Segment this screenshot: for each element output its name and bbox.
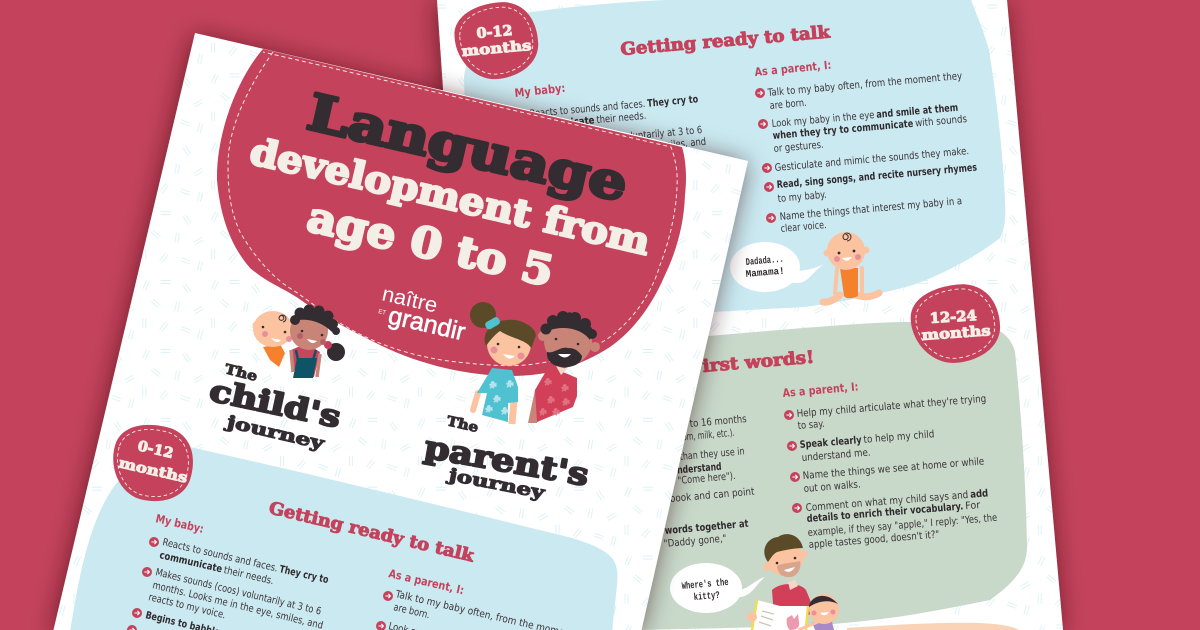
panel: peach next section — [847, 623, 1022, 630]
panel: title blob — [217, 49, 686, 376]
text: as a parent list 12-24 months: add — [970, 488, 989, 501]
text: as a parent list (back): Name the things that interest my baby in a — [779, 196, 963, 223]
text: as a parent list 12-24 months: details to enrich their vocabulary. — [806, 501, 964, 525]
heading: the child's journey: journey — [222, 412, 327, 454]
panel: getting ready to talk (back) — [464, 0, 1005, 320]
text: as a parent list 12-24 months: Comment on what my child says and — [805, 490, 969, 514]
front sheet — [53, 33, 748, 630]
badge: 12-24 months: months — [921, 323, 991, 344]
speech bubble: Dadada Mamama: Dadada... — [745, 254, 784, 269]
badge: 0-12 months (front): months — [117, 455, 189, 487]
speech bubble: Where's the kitty — [670, 563, 765, 613]
text: as a parent list 12-24 months: out on walks. — [803, 479, 861, 495]
logo: naitre et grandir — [378, 282, 468, 346]
heading: getting ready to talk (front): Getting ready to talk — [267, 498, 477, 567]
logo: naitre et grandir: ET — [378, 309, 387, 317]
title: age 0 to 5: age 0 to 5 — [303, 192, 558, 296]
heading: the parent's journey — [422, 413, 591, 504]
icon: mother and father — [470, 302, 600, 424]
panel: first words — [640, 322, 1027, 630]
text: child list 12-24 months (partly hidden): to 16 months — [689, 414, 747, 430]
text: as a parent list 12-24 months: example, if they say "apple," I reply: "Yes, the — [807, 513, 998, 539]
heading: the parent's journey: journey — [444, 465, 548, 504]
panel: getting ready to talk (front) — [70, 447, 617, 630]
text: as a parent list 12-24 months: Speak clearly — [799, 435, 862, 451]
logo: naitre et grandir: grandir — [386, 302, 468, 346]
heading: getting ready to talk (back): Getting ready to talk — [620, 22, 832, 60]
text: as a parent list (back): when they try to communicate — [772, 119, 914, 142]
speech bubble: Where's the kitty: Where's the — [681, 577, 729, 593]
text: as a parent list 12-24 months: As a parent, I: — [782, 379, 859, 400]
heading: first words: First words! — [689, 348, 815, 378]
text: child list 12-24 months (partly hidden): book and can point — [669, 487, 755, 505]
text: my baby list (back): communicate — [529, 115, 595, 132]
text: child list 12-24 months (partly hidden): mom, milk, etc.). — [675, 428, 735, 444]
text: as a parent list (front): are born. — [392, 602, 431, 621]
text: as a parent list (front) — [376, 566, 597, 630]
text: as a parent list (back): with sounds — [915, 114, 968, 130]
text: my baby list (front) — [127, 511, 329, 630]
heading: the parent's journey: parent's — [422, 429, 591, 494]
text: my baby list (back): Makes sounds (coos) voluntarily at 3 to 6 — [531, 125, 703, 151]
text: child list 12-24 months (partly hidden): than they use in — [679, 446, 745, 463]
speech bubble: Dadada Mamama: Mamama! — [745, 267, 785, 281]
text: child list 12-24 months (partly hidden): understand — [671, 462, 722, 477]
text: as a parent list (back): and smile at them — [876, 103, 959, 121]
icon: baby and girl — [252, 304, 345, 378]
title: Language: Language — [302, 82, 633, 213]
text: as a parent list (back): Read, sing songs, and recite nursery rhymes — [776, 163, 977, 191]
text: as a parent list 12-24 months: Name the things we see at home or while — [802, 456, 985, 482]
text: my baby list (front): communicate — [158, 550, 223, 575]
text: as a parent list 12-24 months: For — [965, 500, 981, 512]
text: my baby list (front): My baby: — [154, 511, 205, 536]
text: my baby list (front): Reacts to sounds and faces. — [161, 537, 279, 574]
heading: the child's journey: child's — [206, 374, 344, 435]
text: as a parent list 12-24 months: to help my child — [863, 429, 935, 446]
icon: seated baby — [823, 232, 879, 302]
text: as a parent list (back): clear voice. — [780, 220, 827, 235]
heading: the parent's journey: The — [445, 413, 480, 436]
speech bubble: Dadada Mamama — [730, 242, 824, 292]
text: as a parent list (back) — [754, 58, 977, 235]
text: as a parent list (front): As a parent, I: — [387, 566, 466, 597]
text: as a parent list 12-24 months: understand me. — [801, 447, 871, 464]
text: my baby list (back): Reacts to sounds and faces. — [529, 99, 646, 120]
text: as a parent list 12-24 months: Help my child articulate what they're trying — [796, 394, 987, 420]
text: my baby list (back): months. Looks me in the eye, smiles, and — [531, 137, 707, 163]
text: my baby list (back): They cry to — [647, 94, 699, 110]
badge: 0-12 months (back) — [452, 0, 541, 82]
text: as a parent list (back): Look my baby in the eye — [771, 110, 875, 130]
text: as a parent list (back): Talk to my baby often, from the moment they — [766, 71, 963, 99]
text: my baby list (back) — [514, 81, 707, 163]
icon: father reading to child — [747, 534, 839, 630]
text: as a parent list 12-24 months: apple tastes good, doesn't it?" — [808, 530, 940, 551]
text: my baby list (front): Makes sounds (coos) voluntarily at 3 to 6 — [154, 567, 322, 618]
badge: 0-12 months (back): months — [461, 38, 532, 60]
badge: 12-24 months — [908, 281, 1003, 366]
heading: the child's journey — [206, 361, 344, 454]
text: child list 12-24 months (partly hidden) — [663, 414, 755, 550]
text: my baby list (back): their needs. — [596, 111, 647, 126]
text: child list 12-24 months (partly hidden): "Daddy gone," — [663, 534, 727, 550]
badge: 0-12 months (front) — [104, 416, 201, 510]
text: as a parent list 12-24 months: to say. — [797, 419, 825, 432]
back sheet — [437, 0, 1063, 630]
badge: 0-12 months (front): 0-12 — [136, 438, 175, 462]
badge: 0-12 months (back): 0-12 — [476, 23, 513, 42]
text: my baby list (front): They cry to — [278, 564, 329, 586]
text: child list 12-24 months (partly hidden): words together at — [664, 519, 749, 537]
text: as a parent list 12-24 months — [782, 379, 998, 551]
text: child list 12-24 months (partly hidden): "Come here"). — [677, 471, 736, 487]
heading: the child's journey: The — [223, 361, 259, 385]
text: as a parent list (back): to my baby. — [777, 190, 827, 205]
badge: 12-24 months: 12-24 — [929, 308, 977, 327]
text: my baby list (front): their needs. — [223, 565, 275, 587]
text: my baby list (back): My baby: — [514, 81, 566, 100]
speech bubble: Where's the kitty: kitty? — [693, 590, 720, 604]
logo: naitre et grandir: naître — [380, 282, 440, 317]
text: my baby list (front): reacts to my voice. — [147, 592, 227, 621]
text: as a parent list (back): or gestures. — [773, 140, 824, 155]
text: as a parent list (back): As a parent, I: — [754, 58, 832, 79]
title: development from: development from — [246, 129, 654, 264]
text: as a parent list (back): are born. — [769, 98, 807, 112]
text: as a parent list (back): Gesticulate and mimic the sounds they make. — [774, 146, 970, 174]
